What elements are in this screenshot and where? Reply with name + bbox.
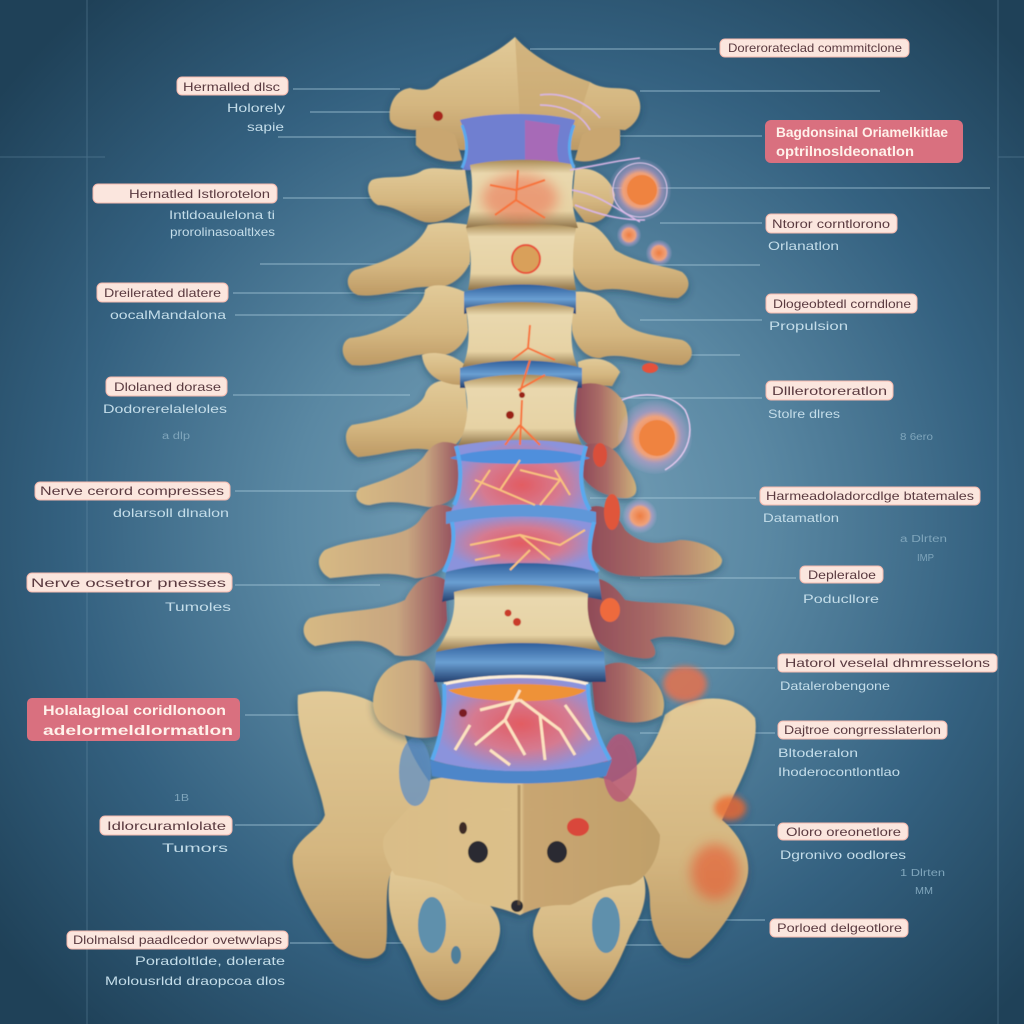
label: degenerated condition: Dlogeobtedl corndlone [773,297,911,311]
label: deterioration [766,381,934,443]
top vertebra [390,37,640,170]
label: nerve cord compresses: dolarsoll dlnalon [113,506,229,520]
callout: pathological condition [27,698,240,741]
pelvis [293,691,756,1000]
processes right [572,169,734,722]
label: herniated distortion: Hernatled Istlorotelon [129,187,270,201]
label: bottom left: Molousrldd draopcoa dlos [105,974,285,988]
label: nerve root presses [27,573,232,614]
label: depletion: Poducllore [803,592,879,606]
leader lines [233,49,990,945]
label: herniated distortion: prorolinasoaltlxes [170,225,275,239]
label: degenerative balances: IMP [917,553,934,564]
label: degenerated compressions: Dorerorateclad commmitclone [728,41,902,55]
label: intervertebral tumors: Idlorcuramlolate [107,819,226,833]
label: depletion: Depleraloe [808,568,876,582]
label: nerve cord compresses [35,482,230,520]
label: herniated distortion: Intldoaulelona ti [169,208,275,222]
label: herniated disc: Holorely [227,101,285,115]
label: degenerated condition: Propulsion [769,319,848,333]
discs and vertebral bodies [430,125,612,784]
label: bottom left [67,931,288,988]
label: displaced disc: Dodorerelaleloles [103,402,227,416]
label: degenerative balances [760,487,980,564]
label: degenerative balances: Harmeadoladorcdlge btatemales [766,489,974,503]
label: nerve cord compresses: Nerve cerord compresses [40,484,224,498]
label: deteriorated disc: Dreilerated dlatere [104,286,221,300]
label: motor conditions: Ntoror corntlorono [772,217,890,231]
label: vessel compressions [778,654,997,693]
label: deteriorated disc: oocalMandalona [110,308,226,322]
label: herniated disc: Hermalled dlsc [183,80,280,94]
label: degenerative balances: a Dlrten [900,534,947,545]
label: displaced disc: a dlp [162,431,191,442]
label: chronic conditions: Oloro oreonetlore [786,825,901,839]
label: chronic conditions: Dgronivo oodlores [780,848,906,862]
label: herniated distortion [93,184,277,239]
label: deterioration: Dlllerotoreratlon [772,384,887,398]
label: chronic conditions: 1 Dlrten [900,868,945,879]
callout: segmental deformities [765,120,963,163]
label: vessel compressions: Datalerobengone [780,679,890,693]
label: degenerated condition [766,294,917,333]
spine illustration [293,37,756,1000]
label: motor conditions [766,214,897,253]
label: herniated disc [177,77,288,134]
label: compression [778,721,947,779]
label: displaced disc [103,377,227,442]
labels right [720,39,997,937]
label: compression: Dajtroe congrresslaterlon [784,723,941,737]
processes left [304,168,470,738]
label: intervertebral tumors: Tumors [162,841,228,855]
label: compression: Bltoderalon [778,746,858,760]
label: depletion [800,566,883,606]
label: bottom left: Dlolmalsd paadlcedor ovetwvlaps [73,933,282,947]
label: chronic conditions: MM [915,886,933,897]
label: paired degeneration [770,919,908,937]
callout: segmental deformities: optrilnosldeonatlon [776,144,914,159]
label: deteriorated disc [97,283,228,322]
nerve damage network [455,170,658,765]
label: compression: Ihoderocontlontlao [778,765,900,779]
callout: segmental deformities: Bagdonsinal Oriamelkitlae [776,125,948,140]
note: 1B [174,793,189,804]
label: deterioration: 8 6ero [900,432,934,443]
label: vessel compressions: Hatorol veselal dhmresselons [785,656,990,670]
label: chronic conditions [778,823,945,897]
labels left [27,77,288,988]
callout: pathological condition: adelormeldlormatlon [43,723,233,738]
label: nerve root presses: Nerve ocsetror pnesses [31,576,226,590]
label: motor conditions: Orlanatlon [768,239,839,253]
label: degenerated compressions [720,39,909,57]
label: bottom left: Poradoltlde, dolerate [135,954,285,968]
label: displaced disc: Dlolaned dorase [114,380,221,394]
label: nerve root presses: Tumoles [165,600,231,614]
label: paired degeneration: Porloed delgeotlore [777,921,902,935]
label: intervertebral tumors [100,816,232,855]
callout: pathological condition: Holalagloal coridlonoon [43,703,226,718]
nerve lesions [540,94,707,702]
label: degenerative balances: Datamatlon [763,511,839,525]
label: deterioration: Stolre dlres [768,407,840,421]
label: herniated disc: sapie [247,120,284,134]
